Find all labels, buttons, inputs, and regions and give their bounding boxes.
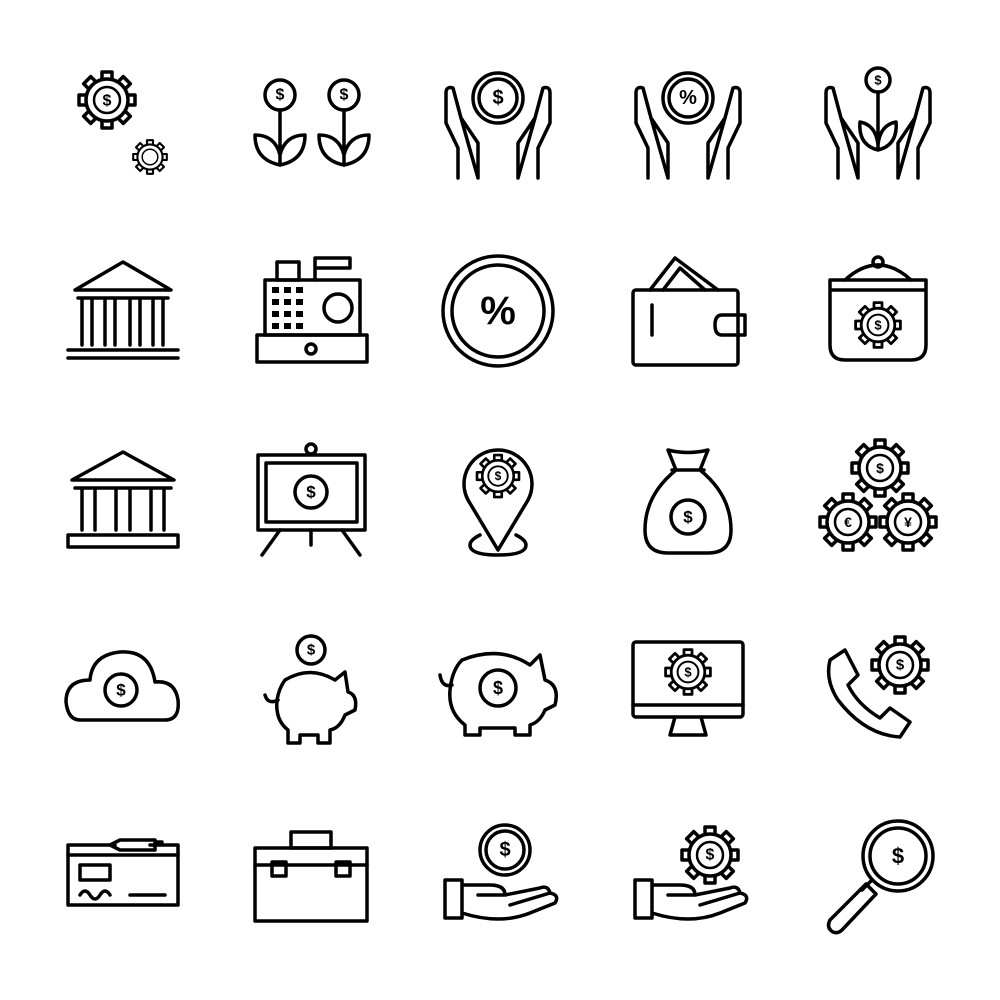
icon: hand with gear	[635, 827, 747, 919]
icon: money plants: $	[340, 86, 349, 104]
icon: hands with coin: $	[492, 87, 504, 109]
icon: bank 2	[68, 452, 178, 547]
icon: hands with plant: $	[874, 72, 882, 88]
icon: three gears: $	[876, 460, 884, 476]
icon: phone with gear	[829, 637, 928, 737]
icon: hands with percent: %	[679, 87, 697, 109]
icon: check with pen	[68, 840, 178, 905]
icon: percent circle: %	[480, 289, 516, 333]
icon: hand with coin	[445, 825, 557, 919]
icon: three gears	[820, 440, 936, 550]
icon: money bag	[645, 450, 731, 553]
icon: piggy bank with dollar	[440, 654, 556, 735]
icon: hands with coin	[446, 73, 550, 178]
icon: bank	[68, 262, 178, 358]
icon: board with coin	[258, 444, 365, 555]
icon: money plants	[255, 80, 369, 165]
icon: hands with percent	[636, 73, 740, 178]
icon: monitor with gear	[633, 642, 743, 735]
icon: hands with plant	[826, 68, 930, 178]
icon: pot with gear: $	[874, 318, 882, 332]
icon: percent circle	[443, 256, 553, 366]
icon: briefcase	[255, 832, 367, 921]
icon: phone with gear: $	[896, 656, 905, 674]
icon: cloud with coin: $	[116, 680, 126, 700]
icon: piggy bank with dollar: $	[493, 678, 503, 698]
icon: board with coin: $	[306, 482, 316, 502]
icon: monitor with gear: $	[684, 664, 692, 680]
icon: three gears: €	[844, 514, 852, 530]
icon: three gears: ¥	[904, 514, 912, 530]
icon: location pin gear: $	[495, 469, 502, 483]
icon: magnifier with coin: $	[892, 844, 904, 868]
icon: location pin gear	[464, 450, 532, 555]
icon: money bag: $	[683, 508, 693, 526]
icon: money plants: $	[276, 86, 285, 104]
icon: cash register	[257, 258, 367, 362]
icon: piggy bank with coin above	[265, 636, 356, 743]
icon: hand with coin: $	[499, 839, 511, 861]
icon: pot with gear	[830, 257, 926, 360]
icon: hand with gear: $	[706, 846, 715, 864]
icon: gears with dollar: $	[103, 92, 112, 110]
icon: magnifier with coin	[829, 821, 933, 933]
icon: gears with dollar	[79, 72, 167, 174]
icon: wallet	[633, 258, 745, 365]
icon: piggy bank with coin above: $	[307, 642, 316, 658]
icon: cloud with coin	[66, 652, 178, 720]
